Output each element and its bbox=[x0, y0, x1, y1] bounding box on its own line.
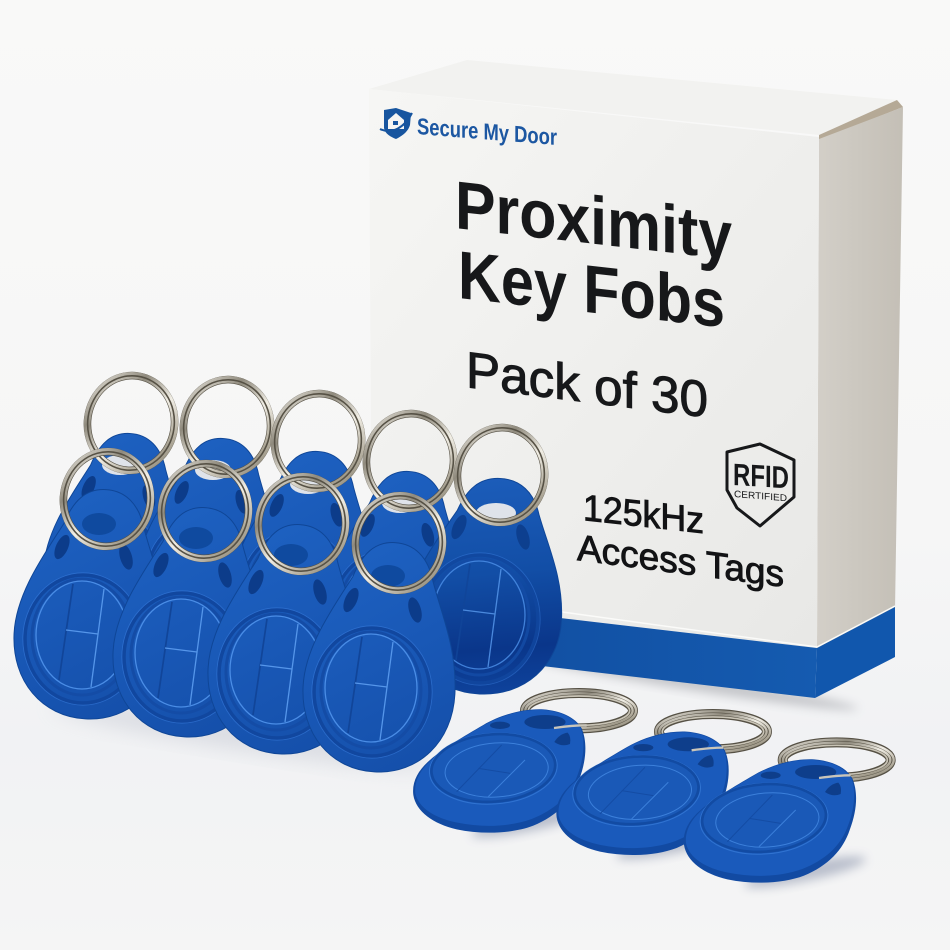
band highlight line bbox=[555, 606, 895, 647]
brand logo bbox=[380, 108, 557, 150]
floor shadows bbox=[50, 648, 868, 894]
badge: RFID certified: CERTIFIED bbox=[734, 489, 787, 504]
box blue band front bbox=[372, 596, 817, 698]
label: Access Tags: Access Tags bbox=[577, 526, 784, 595]
front row fob 1 bbox=[10, 444, 174, 723]
box flap edge bbox=[819, 100, 903, 140]
front row fob 3 bbox=[204, 469, 368, 758]
lying fob 3 bbox=[684, 740, 894, 883]
front row fob 4 bbox=[299, 488, 463, 776]
brand name: Secure My Door bbox=[417, 113, 557, 150]
badge: RFID certified: RFID bbox=[733, 457, 789, 495]
box blue band side bbox=[815, 607, 895, 698]
subheading: Pack of 30: Pack of 30 bbox=[466, 341, 708, 428]
box top face bbox=[369, 60, 897, 135]
box side face bbox=[817, 107, 903, 648]
icon: shield with house bbox=[380, 108, 412, 139]
back row fob 5 bbox=[402, 420, 569, 698]
back row fob 2 bbox=[133, 372, 287, 658]
heading: Key Fobs: Key Fobs bbox=[458, 237, 725, 342]
back row fob 4 bbox=[319, 406, 473, 691]
heading: Proximity: Proximity bbox=[455, 167, 732, 275]
box front face bbox=[369, 89, 819, 648]
lying fob 2 bbox=[556, 711, 770, 855]
badge: RFID certified bbox=[727, 444, 794, 526]
label: 125kHz: 125kHz bbox=[583, 486, 704, 541]
back row fob 1 bbox=[40, 368, 194, 653]
back row fob 3 bbox=[228, 386, 382, 671]
lying fob 1 bbox=[413, 690, 636, 833]
product box bbox=[369, 60, 903, 698]
front row fob 2 bbox=[109, 456, 273, 741]
